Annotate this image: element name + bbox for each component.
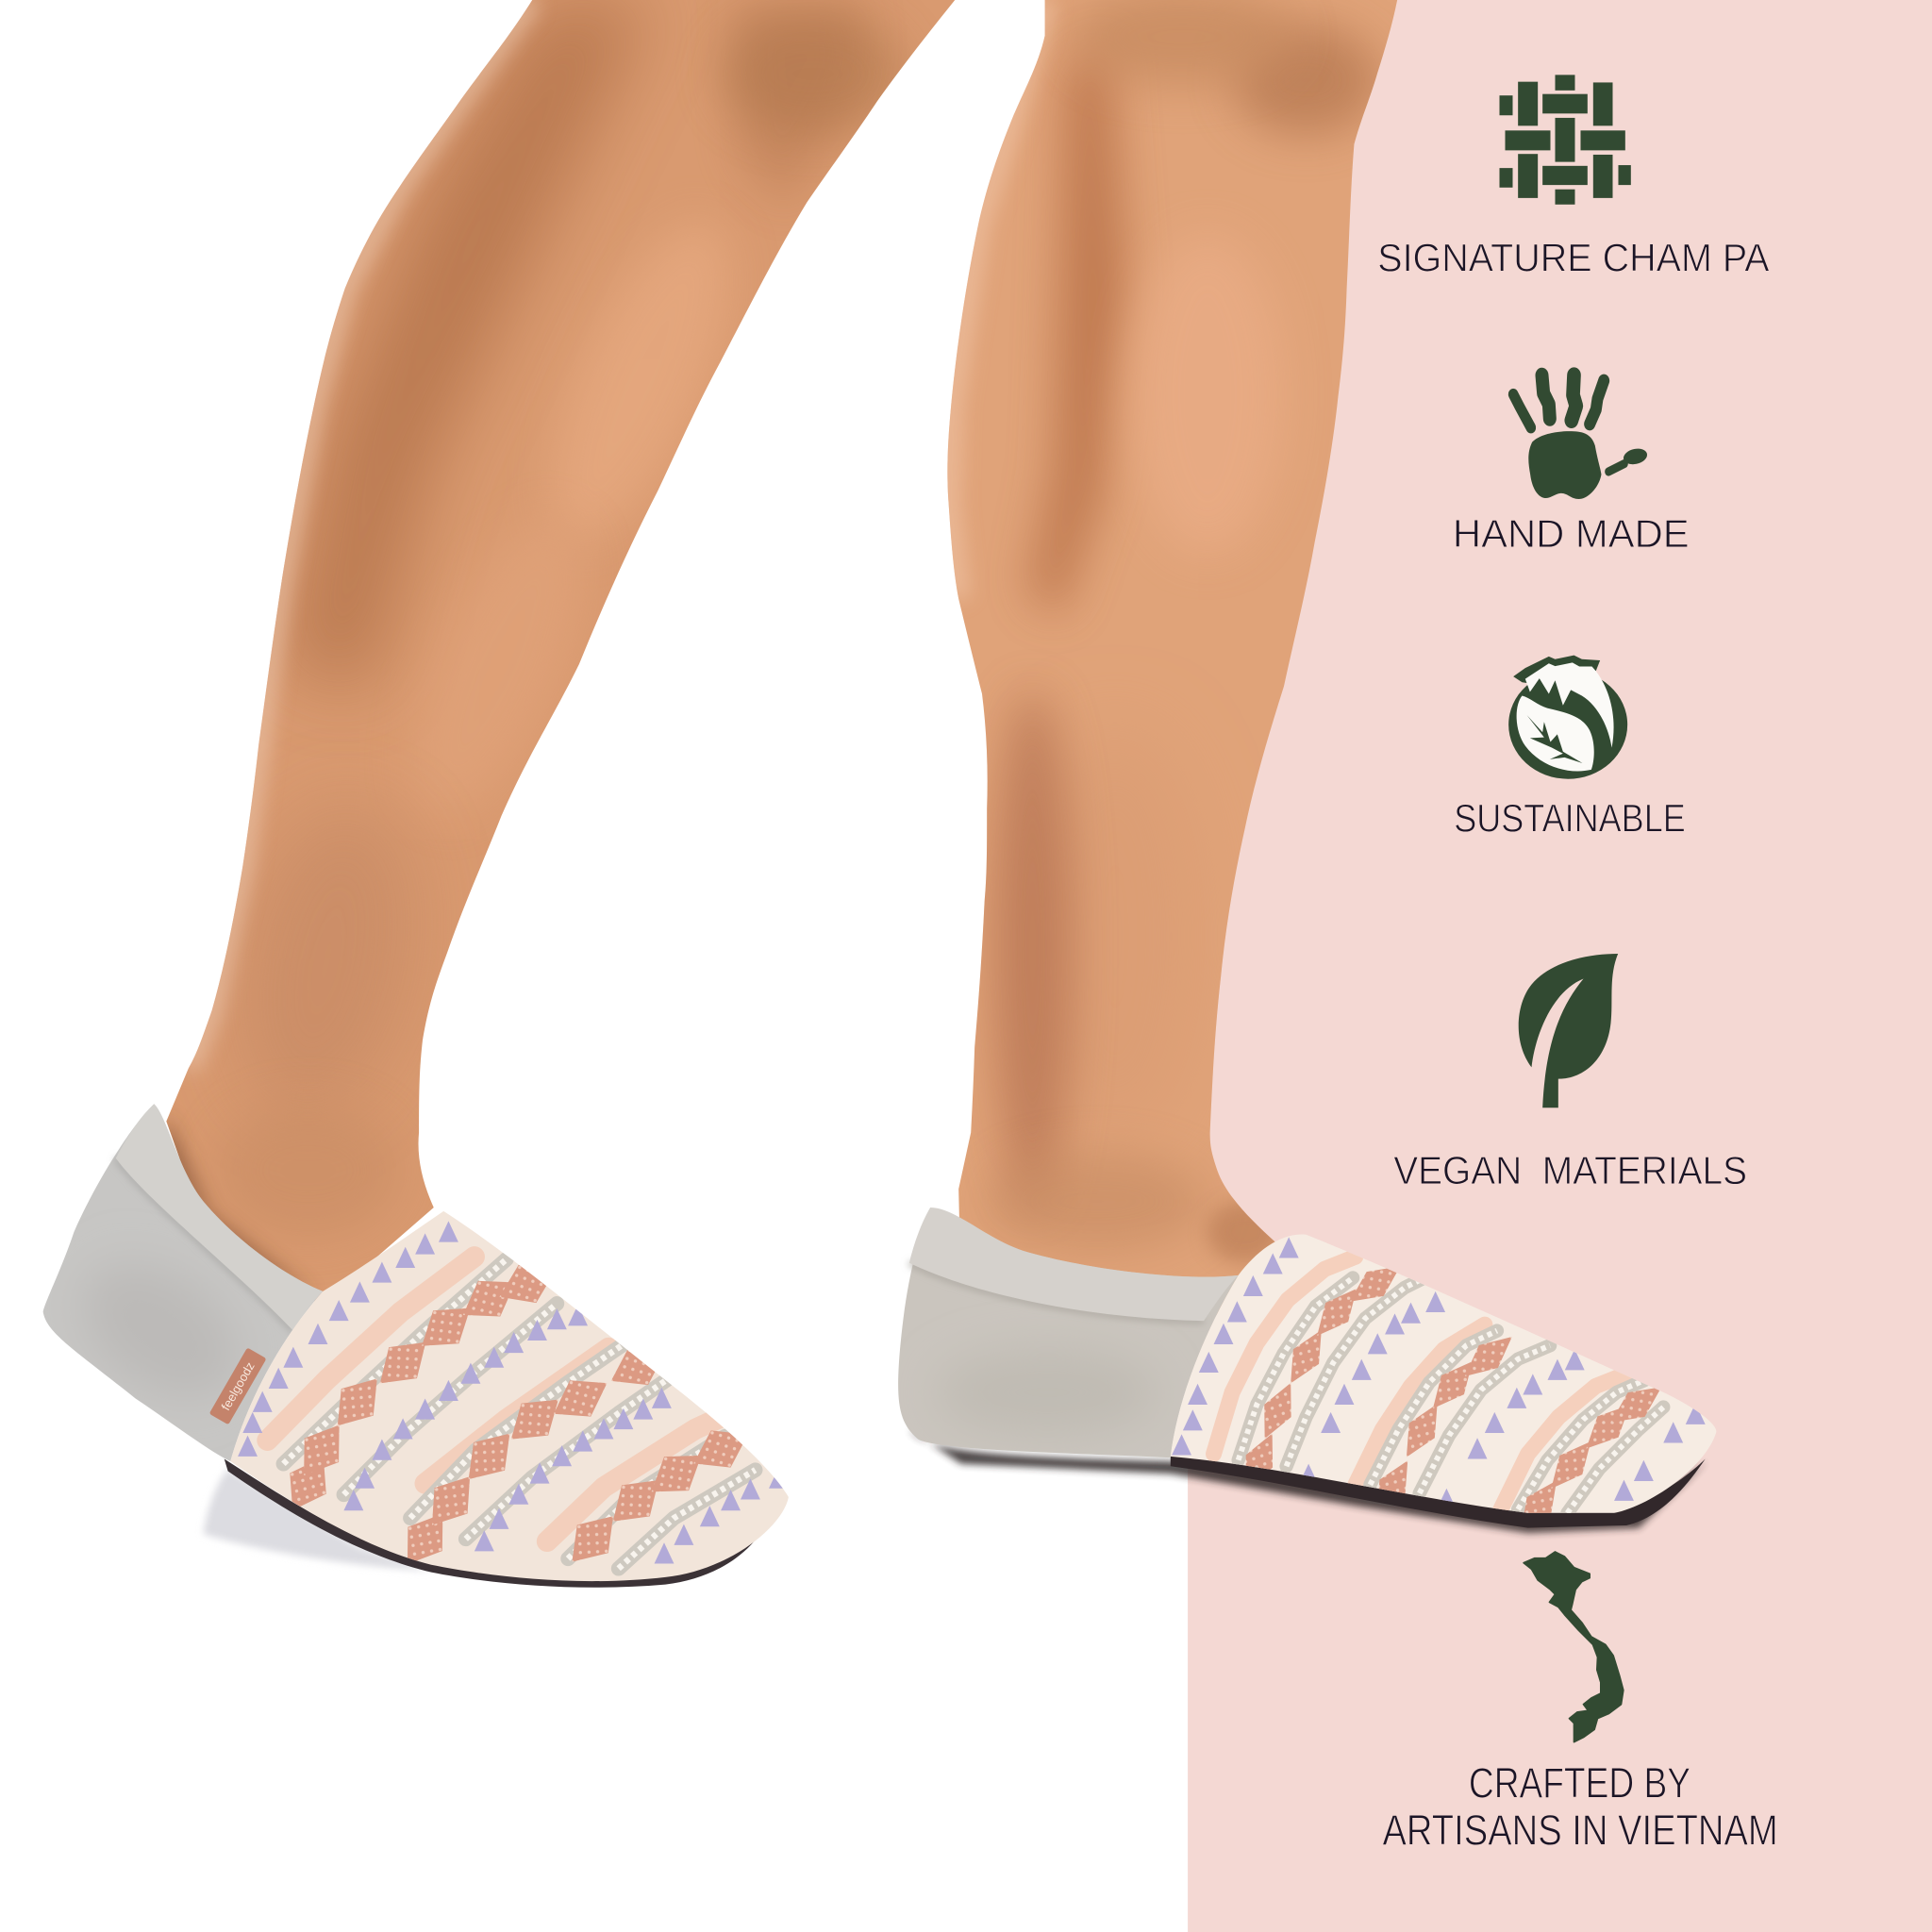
left slipper diamonds	[290, 1264, 743, 1562]
label: crafted by artisans in vietnam	[1382, 1759, 1778, 1854]
slipper: left	[43, 1104, 813, 1602]
icon: map of Vietnam	[1524, 1552, 1624, 1742]
shadow: right slipper sole shadow	[909, 1429, 1707, 1533]
left slipper brand tag: feelgoodz	[218, 1359, 258, 1413]
right slipper woven upper	[1171, 1234, 1717, 1513]
left slipper heel shading	[98, 1277, 222, 1384]
shadow: left slipper cast shadow	[204, 1469, 431, 1571]
label: sustainable: SUSTAINABLE	[1454, 796, 1686, 841]
panel: pink features column	[1188, 0, 1932, 1932]
label: hand made: HAND MADE	[1453, 511, 1690, 556]
icon: hand print	[1513, 375, 1648, 499]
left slipper woven upper	[230, 1211, 789, 1581]
right slipper grey heel	[898, 1210, 1239, 1457]
left slipper lavender triangles	[238, 1221, 789, 1563]
left slipper collar fold	[116, 1104, 323, 1331]
left slipper brand tag	[209, 1347, 267, 1424]
icon: sustainable leaf badge	[1508, 656, 1627, 779]
label: vegan materials: VEGAN MATERIALS	[1393, 1148, 1747, 1192]
label: crafted by artisans in vietnam: ARTISANS IN VIETNAM	[1382, 1806, 1778, 1854]
right slipper lavender triangles	[1172, 1237, 1706, 1509]
label: crafted by artisans in vietnam: CRAFTED BY	[1469, 1759, 1690, 1807]
icon: vegan leaf	[1519, 954, 1618, 1108]
left slipper grey heel	[43, 1104, 323, 1461]
slipper: right	[898, 1208, 1738, 1541]
right slipper collar fold	[909, 1208, 1239, 1321]
right slipper sole	[1171, 1454, 1706, 1528]
right slipper diamonds	[1245, 1268, 1659, 1513]
label: signature cham pa: SIGNATURE CHAM PA	[1377, 235, 1770, 279]
photo: left leg	[158, 0, 955, 1306]
left slipper sole	[225, 1458, 764, 1588]
right slipper heel shading	[968, 1364, 1127, 1421]
icon: woven cham pa pattern	[1499, 75, 1631, 205]
photo: right leg	[947, 0, 1397, 1319]
